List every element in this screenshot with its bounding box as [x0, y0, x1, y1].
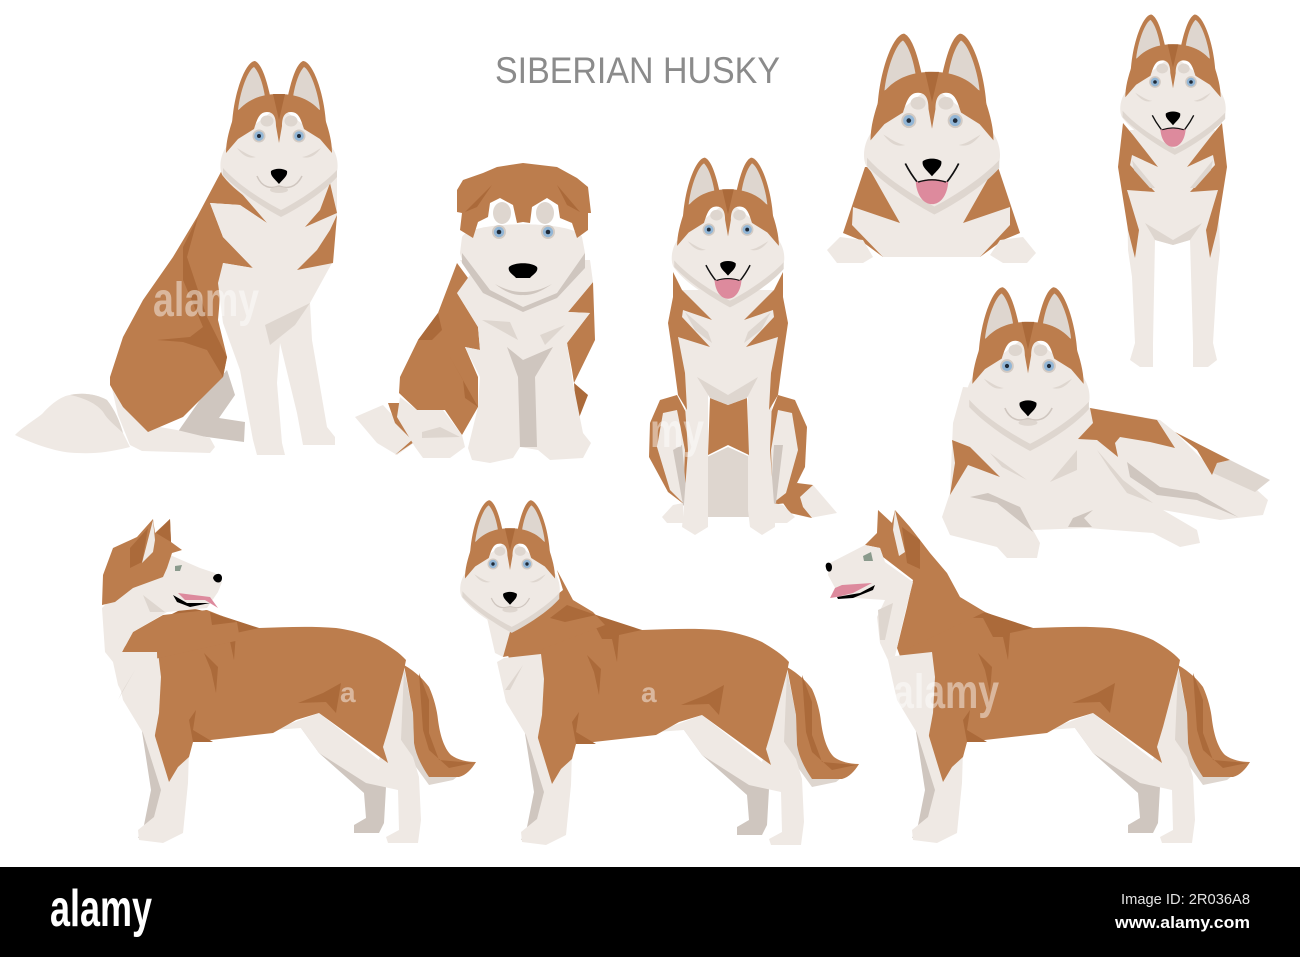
dog: standing husky, front view with tongue: [1118, 14, 1227, 367]
watermark: alamy on first dog: alamy: [153, 274, 259, 327]
watermark: letter on seventh dog: a: [340, 677, 356, 708]
watermark: alamy on last dog: alamy: [893, 666, 999, 719]
dog: standing husky facing viewer: [460, 500, 859, 845]
dog: sitting husky, front view with tongue: [649, 158, 837, 535]
dog: lying husky, side body: [942, 287, 1270, 558]
watermark: letters on third dog: my: [650, 405, 704, 458]
footer logo: alamy: [50, 880, 152, 938]
dog: standing husky looking back: [102, 519, 476, 843]
image id: Image ID: 2R036A8: [1121, 891, 1250, 908]
watermark: letter on eighth dog: a: [641, 677, 657, 708]
dog: sitting puppy: [355, 163, 595, 463]
footer bar: [0, 867, 1300, 957]
title: SIBERIAN HUSKY: [495, 50, 780, 91]
dog: lying husky, front view with tongue: [827, 34, 1036, 263]
dog: large sitting husky, side view: [15, 61, 338, 455]
dog: standing husky facing left: [826, 510, 1250, 843]
website: www.alamy.com: [1114, 913, 1250, 932]
